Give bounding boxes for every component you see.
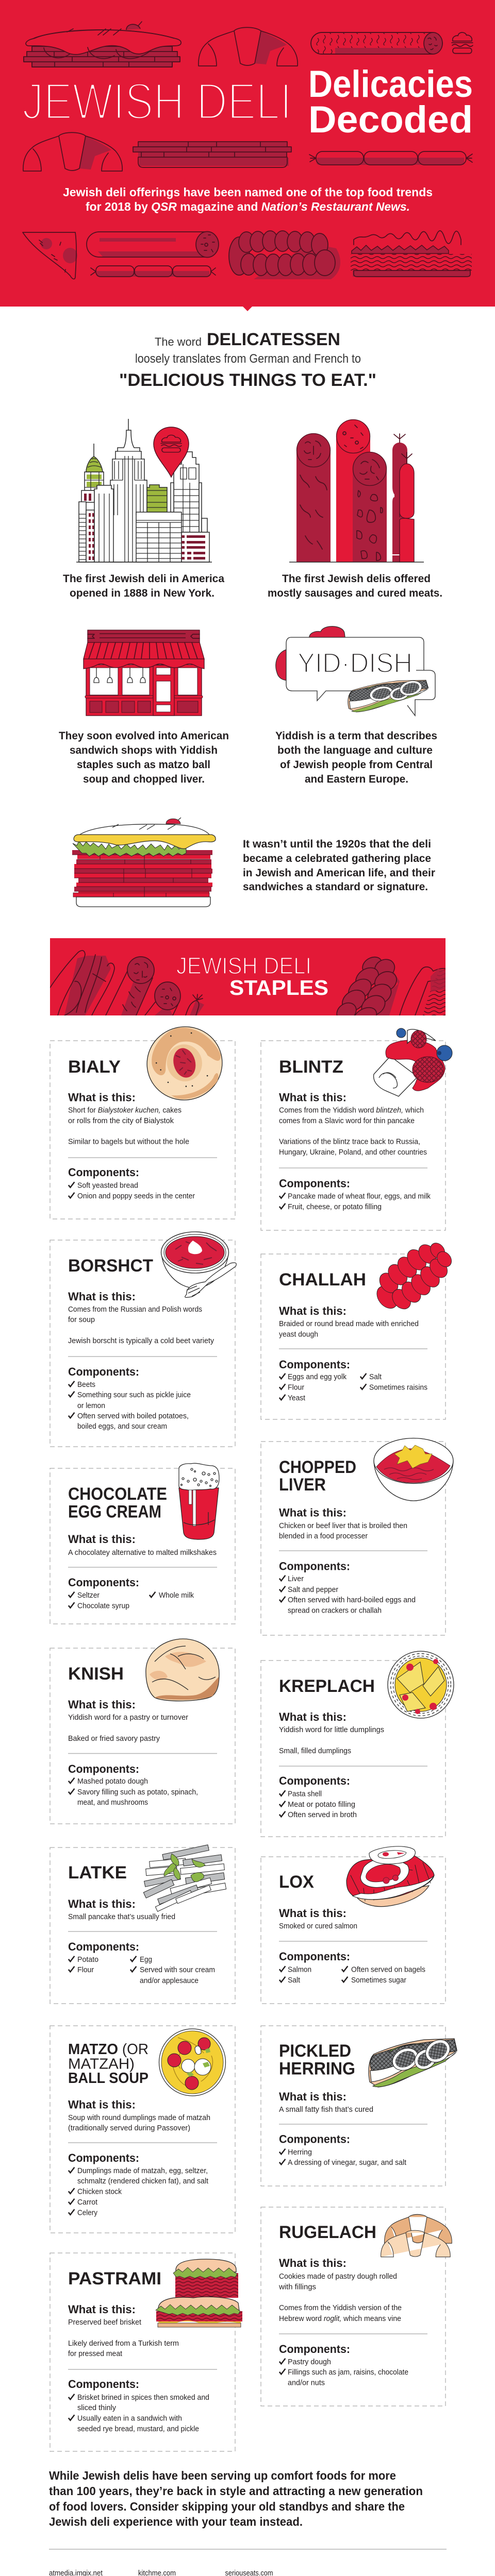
icon: Yiddish speech bubbles: [276, 626, 435, 716]
caption: sausages: The first Jewish delis offered: [282, 573, 431, 585]
heading: Matzo Ball Soup: MATZO (OR: [68, 2041, 148, 2058]
components: Matzo: Carrot: [77, 2198, 97, 2207]
what is this: Latke: [68, 1897, 175, 1921]
card: Rugelach: [261, 2207, 452, 2406]
caption: 1920s: [243, 838, 435, 893]
banner title: STAPLES: STAPLES: [229, 976, 328, 999]
caption: Yiddish: Yiddish is a term that describes: [275, 730, 437, 742]
caption: 1920s: became a celebrated gathering place: [243, 853, 431, 865]
components: Latke: and/or applesauce: [140, 1977, 199, 1985]
intro line 1: Jewish deli offerings have been named one of the top food trends: [63, 185, 433, 199]
heading: Knish: KNISH: [68, 1664, 124, 1684]
what is this: Matzo: (traditionally served during Passover): [68, 2124, 190, 2132]
what is this: Kreplach: Yiddish word for little dumplings: [279, 1726, 384, 1734]
icon: sausage links 2: [91, 266, 216, 277]
components: Kreplach: Meat or potato filling: [288, 1801, 355, 1809]
card: Chopped Liver: [261, 1438, 453, 1635]
heading: Kreplach: KREPLACH: [279, 1676, 375, 1696]
card: Latke: [50, 1845, 235, 2004]
components: Borscht: [68, 1365, 191, 1431]
heading: Chocolate Egg Cream: EGG CREAM: [68, 1502, 161, 1522]
what is this: Matzo: What is this:: [68, 2098, 136, 2111]
what is this: Borscht: Comes from the Russian and Polish words: [68, 1306, 202, 1314]
caption: Yiddish: [275, 730, 437, 785]
what is this: Latke: Small pancake that’s usually fried: [68, 1913, 175, 1921]
components: Blintz: Fruit, cheese, or potato filling: [288, 1203, 382, 1211]
what is this: Kreplach: Small, filled dumplings: [279, 1747, 351, 1755]
closing statement: Jewish deli experience with your team instead.: [49, 2515, 303, 2529]
components: Pastrami: seeded rye bread, mustard, and pickle: [77, 2425, 199, 2433]
what is this: Bialy: [68, 1091, 189, 1146]
what is this: Chopped Liver: Chicken or beef liver that is broiled then: [279, 1522, 407, 1530]
icon: kreplach plate: [388, 1651, 454, 1718]
what is this: Rugelach: [278, 2257, 402, 2323]
what is this: Bialy: Similar to bagels but without the hole: [68, 1138, 189, 1146]
intro: delicatessen definition: [119, 330, 376, 390]
heading: Pickled Herring: [279, 2041, 355, 2078]
components: Lox: Sometimes sugar: [351, 1976, 406, 1985]
components: Bialy: Components:: [68, 1166, 139, 1179]
icon: storefront: [84, 630, 204, 716]
what is this: Knish: [68, 1698, 188, 1743]
components: Pastrami: Brisket brined in spices then smoked and: [77, 2394, 209, 2402]
icon: salami: [311, 32, 442, 54]
icon: pickled herring: [369, 2035, 457, 2087]
panel: sandwich shops: [59, 630, 229, 785]
heading: Chopped Liver: [279, 1458, 356, 1495]
components: Pastrami: Usually eaten in a sandwich with: [77, 2414, 182, 2422]
what is this: Chopped Liver: blended in a food processer: [279, 1532, 368, 1540]
icon: sandwich with onions: [24, 22, 181, 67]
icon: lox on bagel: [346, 1846, 434, 1907]
what is this: Lox: What is this:: [279, 1907, 346, 1920]
caption: sandwich shops: sandwich shops with Yiddish: [70, 744, 218, 756]
icon: meat stack on bun: [133, 142, 291, 167]
icon: bialy: [139, 1019, 230, 1108]
components: Pastrami: Components:: [68, 2378, 139, 2391]
components: Kreplach: [279, 1774, 357, 1819]
what is this: Blintz: What is this:: [279, 1091, 346, 1104]
caption: 1920s: sandwiches a standard or signature.: [243, 881, 428, 893]
what is this: Challah: [279, 1304, 419, 1338]
closing statement: of food lovers. Consider skipping your old standbys and share the: [49, 2500, 405, 2513]
components: Knish: [68, 1762, 198, 1807]
components: Bialy: Soft yeasted bread: [77, 1182, 138, 1190]
what is this: Pastrami: Likely derived from a Turkish term: [68, 2340, 179, 2348]
components: Lox: Salt: [288, 1976, 300, 1985]
heading: Bialy: BIALY: [68, 1057, 121, 1077]
components: Latke: Served with sour cream: [140, 1966, 215, 1974]
what is this: Borscht: for soup: [68, 1316, 95, 1324]
heading: Pickled Herring: PICKLED: [279, 2041, 351, 2061]
what is this: Blintz: Hungary, Ukraine, Poland, and other countries: [279, 1148, 427, 1157]
components: Chopped Liver: Salt and pepper: [288, 1586, 338, 1594]
components: Latke: Egg: [140, 1956, 152, 1964]
components: Kreplach: Components:: [279, 1774, 350, 1787]
title: JEWISH DELI: JEWISH DELI: [22, 73, 292, 130]
what is this: Latke: What is this:: [68, 1897, 136, 1910]
heading: Matzo Ball Soup: BALL SOUP: [68, 2070, 148, 2087]
card: Chocolate Egg Cream: [50, 1463, 235, 1624]
components: Challah: Salt: [369, 1373, 382, 1381]
caption: 1920s: It wasn’t until the 1920s that the deli: [243, 838, 431, 850]
what is this: Borscht: What is this:: [68, 1290, 136, 1303]
components: Latke: Potato: [77, 1956, 98, 1964]
icon: blintz: [374, 1028, 452, 1096]
components: Knish: Mashed potato dough: [77, 1777, 148, 1786]
components: Blintz: Components:: [279, 1177, 350, 1190]
components: Lox: Often served on bagels: [351, 1966, 425, 1974]
heading: Pastrami: PASTRAMI: [68, 2269, 161, 2289]
what is this: Rugelach: with fillings: [278, 2283, 316, 2292]
what is this: Egg Cream: A chocolatey alternative to malted milkshakes: [68, 1549, 217, 1557]
components: Rugelach: Pastry dough: [288, 2358, 331, 2366]
what is this: Knish: Yiddish word for a pastry or turnover: [68, 1714, 188, 1722]
heading: Borscht: BORSHCT: [68, 1256, 153, 1276]
what is this: Rugelach: Cookies made of pastry dough rolled: [279, 2273, 397, 2281]
icon: challah: [229, 231, 340, 279]
Delicious things to eat: "DELICIOUS THINGS TO EAT.": [119, 370, 376, 390]
what is this: Herring: [279, 2090, 373, 2114]
icon: pastrami sandwiches: [156, 2259, 242, 2327]
icon: New York skyline with pin: [76, 419, 212, 562]
components: Egg Cream: Components:: [68, 1576, 139, 1589]
panel: 1920s sandwich: [72, 818, 435, 907]
panel: Yiddish: [275, 626, 437, 785]
components: Rugelach: Fillings such as jam, raisins, chocolate: [288, 2368, 408, 2377]
heading: Chopped Liver: LIVER: [279, 1475, 326, 1495]
caption: sandwich shops: soup and chopped liver.: [83, 773, 205, 785]
icon: bowl of borscht: [161, 1232, 236, 1297]
components: Kreplach: Often served in broth: [288, 1811, 357, 1819]
icon: large salami: [87, 232, 219, 258]
components: Latke: Components:: [68, 1940, 139, 1953]
components: Herring: Herring: [288, 2148, 312, 2157]
closing statement: than 100 years, they’re back in style and attracting a new generation: [49, 2484, 423, 2498]
components: Latke: [68, 1940, 215, 1985]
components: Challah: [279, 1358, 427, 1402]
what is this: Knish: Baked or fried savory pastry: [68, 1735, 160, 1743]
caption: first deli: [63, 573, 224, 599]
caption: sausages: mostly sausages and cured meats.: [268, 587, 442, 599]
what is this: Bialy: Short for Bialystoker kuchen, cakes: [68, 1107, 182, 1115]
caption: sandwich shops: [59, 730, 229, 785]
components: Borscht: or lemon: [77, 1402, 105, 1410]
components: Knish: Savory filling such as potato, spinach,: [77, 1788, 198, 1797]
components: Egg Cream: Chocolate syrup: [77, 1602, 129, 1611]
what is this: Blintz: Variations of the blintz trace back to Russia,: [279, 1138, 420, 1146]
components: Challah: Yeast: [288, 1394, 305, 1402]
heading: Challah: CHALLAH: [279, 1270, 366, 1290]
card: Pastrami: [50, 2253, 242, 2451]
what is this: Chopped Liver: [279, 1506, 407, 1540]
what is this: Pastrami: for pressed meat: [68, 2350, 122, 2358]
what is this: Kreplach: [279, 1710, 384, 1755]
what is this: Blintz: Comes from the Yiddish word blintzeh, which: [279, 1107, 424, 1115]
what is this: Chopped Liver: What is this:: [279, 1506, 346, 1519]
components: Borscht: boiled eggs, and sour cream: [77, 1422, 167, 1431]
icon: sausage links: [309, 151, 472, 165]
what is this: Matzo: Soup with round dumplings made of matzah: [68, 2114, 210, 2122]
icon: bowl of chopped liver: [374, 1438, 453, 1501]
what is this: Rugelach: Comes from the Yiddish version of the: [279, 2304, 402, 2312]
caption: Yiddish: and Eastern Europe.: [305, 773, 408, 785]
components: Egg Cream: Whole milk: [159, 1591, 194, 1600]
banner: Jewish Deli Staples: [50, 938, 446, 1015]
icon: knish: [146, 1639, 219, 1701]
components: Matzo: [68, 2151, 208, 2217]
hero background with pointer: [0, 0, 495, 311]
icon: matzo ball soup: [159, 2029, 226, 2096]
icon: croissant: [199, 27, 298, 66]
components: Bialy: [68, 1166, 195, 1200]
loosely translates: loosely translates from German and French to: [135, 352, 361, 366]
components: Egg Cream: [68, 1576, 194, 1611]
heading: Latke: LATKE: [68, 1863, 127, 1883]
components: Challah: Eggs and egg yolk: [288, 1373, 347, 1381]
card: Bialy: [50, 1019, 235, 1219]
caption: Yiddish: both the language and culture: [277, 744, 433, 756]
caption: sausages: [268, 573, 442, 599]
what is this: Challah: What is this:: [279, 1304, 346, 1317]
icon: rugelach: [381, 2214, 452, 2257]
icon: standing sausages: [289, 419, 424, 562]
icon: burger: [452, 32, 473, 54]
heading: Lox: LOX: [279, 1872, 314, 1892]
components: Chopped Liver: Often served with hard-boiled eggs and: [288, 1596, 416, 1604]
card: Matzo Ball Soup: [50, 2026, 235, 2233]
what is this: Pastrami: [68, 2303, 179, 2358]
components: Blintz: [279, 1177, 431, 1211]
banner title: JEWISH DELI: JEWISH DELI: [176, 953, 311, 979]
components: Pastrami: [68, 2378, 209, 2433]
components: Matzo: schmaltz (rendered chicken fat), and salt: [77, 2177, 208, 2185]
heading: Chocolate Egg Cream: [68, 1484, 167, 1522]
components: Rugelach: [279, 2343, 408, 2387]
icon: pizza slice: [23, 232, 77, 279]
components: Matzo: Dumplings made of matzah, egg, seltzer,: [77, 2167, 208, 2175]
what is this: Matzo: [68, 2098, 210, 2132]
components: Borscht: Often served with boiled potatoes,: [77, 1412, 189, 1420]
what is this: Bialy: What is this:: [68, 1091, 136, 1104]
caption: 1920s: in Jewish and American life, and their: [243, 867, 435, 879]
components: Bialy: Onion and poppy seeds in the center: [77, 1192, 195, 1200]
components: Herring: Components:: [279, 2133, 350, 2145]
components: Lox: [279, 1950, 425, 1985]
what is this: Challah: Braided or round bread made with enriched: [279, 1320, 419, 1328]
heading: Rugelach: RUGELACH: [279, 2223, 376, 2242]
components: Kreplach: Pasta shell: [288, 1790, 322, 1798]
components: Latke: Flour: [77, 1966, 94, 1974]
what is this: Egg Cream: What is this:: [68, 1533, 136, 1546]
caption: sandwich shops: staples such as matzo ball: [77, 759, 210, 771]
sources: [48, 2569, 303, 2576]
banner food art: [50, 950, 446, 1015]
what is this: Lox: Smoked or cured salmon: [279, 1922, 357, 1930]
caption: Yiddish: of Jewish people from Central: [280, 759, 433, 771]
what is this: Rugelach: Hebrew word roglit, which means vine: [279, 2315, 401, 2323]
heading: Chocolate Egg Cream: CHOCOLATE: [68, 1484, 167, 1504]
card: Challah: [261, 1233, 460, 1419]
icon: big deli sandwich: [351, 231, 472, 277]
components: Pastrami: sliced thinly: [77, 2404, 117, 2412]
components: Chopped Liver: Liver: [288, 1575, 304, 1583]
heading: Matzo Ball Soup: [68, 2041, 148, 2087]
what is this: Pastrami: What is this:: [68, 2303, 136, 2316]
hero panel: [0, 0, 495, 311]
components: Rugelach: and/or nuts: [288, 2379, 325, 2387]
components: Lox: Salmon: [288, 1966, 311, 1974]
what is this: Borscht: [68, 1290, 214, 1345]
intro line 2: for 2018 by QSR magazine and Nation’s Restaurant News.: [86, 200, 410, 213]
components: Chopped Liver: spread on crackers or challah: [288, 1606, 382, 1615]
caption: first deli: The first Jewish deli in America: [63, 573, 224, 585]
components: Egg Cream: Seltzer: [77, 1591, 100, 1600]
what is this: Herring: What is this:: [279, 2090, 346, 2103]
caption: sandwich shops: They soon evolved into American: [59, 730, 229, 742]
title: Decoded: Decoded: [308, 99, 473, 141]
YID-DISH wordmark: YID·DISH: [298, 648, 412, 679]
what is this: Challah: yeast dough: [279, 1330, 318, 1338]
DELICATESSEN: DELICATESSEN: [207, 330, 340, 349]
heading: Blintz: BLINTZ: [279, 1057, 343, 1077]
icon: herring on bun: [348, 678, 428, 712]
components: Blintz: Pancake made of wheat flour, eggs, and milk: [288, 1192, 431, 1200]
icon: layered deli sandwich: [72, 818, 216, 907]
card: Knish: [50, 1639, 235, 1824]
intro text: [63, 185, 433, 213]
icon: map pin: [154, 427, 189, 477]
closing statement: [49, 2469, 423, 2529]
card: Pickled Herring: [261, 2026, 457, 2186]
card: Blintz: [261, 1028, 452, 1230]
heading: Matzo Ball Soup: MATZAH): [68, 2056, 135, 2072]
icon: croissant 2: [23, 132, 122, 171]
what is this: Borscht: Jewish borscht is typically a cold beet variety: [68, 1337, 214, 1345]
what is this: Rugelach: What is this:: [279, 2257, 346, 2269]
what is this: Kreplach: What is this:: [279, 1710, 346, 1723]
main title: [22, 63, 473, 141]
title: Delicacies: Delicacies: [308, 63, 473, 105]
components: Challah: Flour: [288, 1384, 304, 1392]
card: Kreplach: [261, 1651, 454, 1837]
what is this: Lox: [279, 1907, 357, 1930]
what is this: Blintz: [279, 1091, 427, 1157]
closing statement: While Jewish delis have been serving up comfort foods for more: [49, 2469, 396, 2482]
components: Knish: meat, and mushrooms: [77, 1799, 148, 1807]
caption: first deli: opened in 1888 in New York.: [70, 587, 214, 599]
card: Lox: [261, 1846, 446, 2004]
heading: Pickled Herring: HERRING: [279, 2059, 355, 2078]
components: Matzo: Celery: [77, 2209, 98, 2217]
icon: challah: [366, 1233, 460, 1320]
what is this: Blintz: comes from a Slavic word for thin pancake: [279, 1117, 415, 1125]
components: Chopped Liver: [279, 1560, 416, 1615]
components: Matzo: Components:: [68, 2151, 139, 2164]
components: Borscht: Beets: [77, 1381, 95, 1389]
icon: latke strips: [143, 1845, 226, 1911]
icon: egg cream glass: [179, 1463, 219, 1539]
panel: sausages and cured meats: [268, 419, 442, 599]
heading: Chopped Liver: CHOPPED: [279, 1458, 356, 1477]
what is this: Bialy: or rolls from the city of Bialystok: [68, 1117, 174, 1125]
The word: The word: [155, 335, 202, 348]
components: Lox: Components:: [279, 1950, 350, 1963]
components: Borscht: Something sour such as pickle juice: [77, 1391, 191, 1399]
what is this: Herring: A small fatty fish that’s cured: [279, 2106, 373, 2114]
components: Borscht: Components:: [68, 1365, 139, 1378]
components: Challah: Components:: [279, 1358, 350, 1371]
components: Matzo: Chicken stock: [77, 2188, 122, 2196]
components: Rugelach: Components:: [279, 2343, 350, 2355]
what is this: Knish: What is this:: [68, 1698, 136, 1711]
components: Herring: [279, 2133, 406, 2167]
card: Borscht: [50, 1232, 236, 1447]
components: Challah: Sometimes raisins: [369, 1384, 427, 1392]
what is this: Egg Cream: [68, 1533, 217, 1557]
components: Knish: Components:: [68, 1762, 139, 1775]
components: Chopped Liver: Components:: [279, 1560, 350, 1572]
components: Herring: A dressing of vinegar, sugar, and salt: [288, 2159, 406, 2167]
panel: first deli in New York: [63, 419, 224, 599]
what is this: Pastrami: Preserved beef brisket: [68, 2318, 141, 2327]
